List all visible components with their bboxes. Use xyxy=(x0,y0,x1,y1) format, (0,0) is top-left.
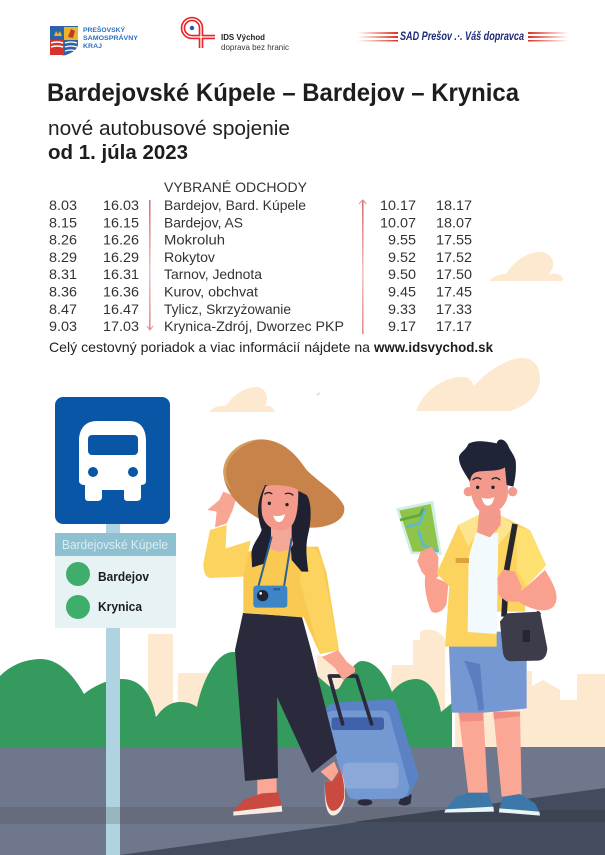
logo: Prešovský samosprávny kraj: PREŠOVSKÝ xyxy=(83,25,126,34)
road xyxy=(120,788,605,855)
return departure times: 9.45 xyxy=(388,284,416,300)
woman body and head xyxy=(203,439,344,654)
suitcase xyxy=(323,676,419,806)
icon: camera xyxy=(253,586,287,608)
destination list xyxy=(55,556,176,628)
sign panel xyxy=(55,397,170,524)
logo: Prešovský samosprávny kraj xyxy=(50,25,139,56)
small cloud fleck xyxy=(316,392,320,395)
man legs and shoes xyxy=(444,712,540,816)
cloud middle xyxy=(209,387,275,412)
return departure times: 18.17 xyxy=(436,197,472,213)
man hand on strap xyxy=(497,569,522,602)
woman sweater xyxy=(243,545,339,654)
cloud large xyxy=(416,358,540,411)
subtitle: nové autobusové spojenie xyxy=(48,118,290,140)
return departure times: 17.52 xyxy=(436,249,472,265)
stop names: Rokytov xyxy=(164,249,215,265)
man ears and face xyxy=(464,487,473,496)
logo: IDS Východ xyxy=(183,19,290,52)
logo: Prešovský samosprávny kraj: KRAJ xyxy=(83,43,102,50)
ground band xyxy=(0,807,605,824)
man shirt xyxy=(437,515,546,647)
man t-shirt xyxy=(468,533,498,634)
outbound departure times: 16.47 xyxy=(103,301,139,317)
man with map xyxy=(396,439,557,816)
woman neck xyxy=(269,525,293,552)
woman face xyxy=(262,485,298,531)
man upper body xyxy=(396,439,557,661)
man neck xyxy=(477,510,501,537)
camera straps xyxy=(258,537,292,587)
bag strap xyxy=(504,524,515,617)
return departure times: 17.50 xyxy=(436,266,472,282)
man left arm xyxy=(425,570,448,613)
return departure times: 9.52 xyxy=(388,249,416,265)
woman raised hand xyxy=(207,490,239,527)
logo: Prešovský samosprávny kraj: SAMOSPRÁVNY xyxy=(83,33,139,42)
footer info line: www.idsvychod.sk xyxy=(373,339,493,355)
stop names: Bardejov, Bard. Kúpele xyxy=(164,197,306,213)
outbound departure times: 8.29 xyxy=(49,249,77,265)
title: Bardejovské Kúpele – Bardejov – Krynica xyxy=(47,79,520,107)
outbound departure times: 8.26 xyxy=(49,232,77,248)
man hair xyxy=(459,439,516,487)
outbound departure times: 8.36 xyxy=(49,284,77,300)
return departure times: 17.45 xyxy=(436,284,472,300)
stop names: Krynica-Zdrój, Dworzec PKP xyxy=(164,318,344,334)
woman legs and shoes xyxy=(233,762,345,816)
outbound departure times: 8.47 xyxy=(49,301,77,317)
ground xyxy=(0,747,605,855)
man shorts xyxy=(448,632,527,713)
timetable xyxy=(49,179,472,334)
woman hand on suitcase xyxy=(322,650,355,680)
return departure times: 10.17 xyxy=(380,197,416,213)
arrow down xyxy=(147,200,153,330)
outbound departure times: 16.29 xyxy=(103,249,139,265)
stop name plate: Bardejovské Kúpele xyxy=(62,538,168,552)
return departure times: 18.07 xyxy=(436,214,472,230)
bus stop sign xyxy=(55,397,176,628)
bushes xyxy=(0,652,452,747)
destination list: Bardejov xyxy=(98,570,149,584)
outbound departure times: 8.15 xyxy=(49,214,77,230)
return departure times: 17.33 xyxy=(436,301,472,317)
outbound departure times: 8.31 xyxy=(49,266,77,282)
outbound departure times: 16.36 xyxy=(103,284,139,300)
woman with suitcase xyxy=(203,439,419,816)
return departure times: 9.17 xyxy=(388,318,416,334)
timetable heading: VYBRANÉ ODCHODY xyxy=(164,179,308,195)
return departure times: 10.07 xyxy=(380,214,416,230)
bag xyxy=(500,612,547,661)
return departure times: 17.55 xyxy=(436,232,472,248)
man hand with map xyxy=(417,547,438,582)
logo: IDS Východ: IDS Východ xyxy=(221,32,265,42)
date: od 1. júla 2023 xyxy=(48,142,188,164)
man right arm xyxy=(518,570,557,610)
outbound departure times: 17.03 xyxy=(103,318,139,334)
woman hat xyxy=(223,439,344,528)
logo: IDS Východ: doprava bez hranic xyxy=(221,42,290,52)
stop names xyxy=(164,197,344,334)
destination list: Krynica xyxy=(98,600,143,614)
outbound departure times: 9.03 xyxy=(49,318,77,334)
woman trousers xyxy=(235,613,337,781)
stop names: Kurov, obchvat xyxy=(164,284,258,300)
stop name plate xyxy=(55,533,176,556)
outbound departure times: 16.31 xyxy=(103,266,139,282)
stop names: Mokroluh xyxy=(164,232,225,248)
outbound departure times: 16.26 xyxy=(103,232,139,248)
return departure times xyxy=(380,197,472,334)
return departure times: 9.33 xyxy=(388,301,416,317)
footer info line: Celý cestovný poriadok a viac informácií nájdete na xyxy=(49,339,370,355)
return departure times: 9.50 xyxy=(388,266,416,282)
stop names: Tarnov, Jednota xyxy=(164,266,262,282)
stop names: Tylicz, Skrzyżowanie xyxy=(164,301,291,317)
stop names: Bardejov, AS xyxy=(164,214,243,230)
return departure times: 9.55 xyxy=(388,232,416,248)
icon: bus xyxy=(79,421,146,501)
map xyxy=(396,501,442,555)
road band xyxy=(353,810,605,822)
sign pole xyxy=(106,524,120,855)
outbound departure times xyxy=(49,197,139,334)
outbound departure times: 16.15 xyxy=(103,214,139,230)
outbound departure times: 8.03 xyxy=(49,197,77,213)
woman hair xyxy=(251,485,311,572)
buildings xyxy=(148,630,605,747)
arrow up xyxy=(359,200,366,334)
return departure times: 17.17 xyxy=(436,318,472,334)
cloud right xyxy=(489,252,563,281)
logo: SAD Prešov: SAD Prešov .·. Váš dopravca xyxy=(400,29,524,43)
outbound departure times: 16.03 xyxy=(103,197,139,213)
